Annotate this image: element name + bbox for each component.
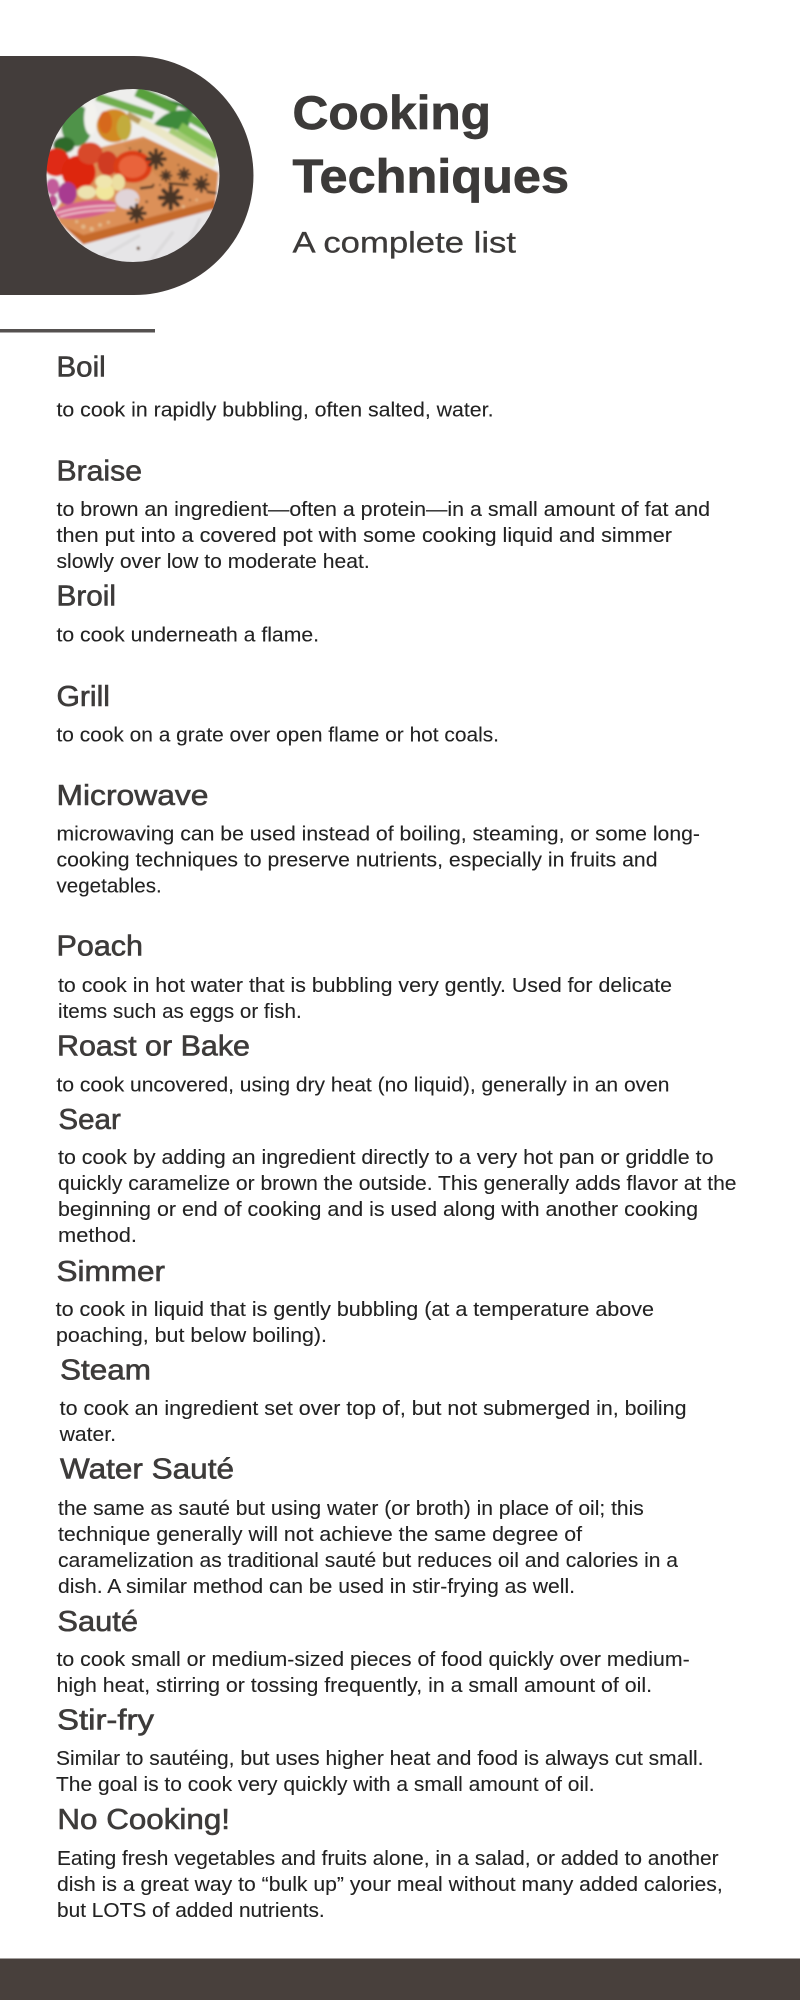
entry: Grill (56, 681, 499, 746)
entry: Steam: to cook an ingredient set over top of, but not submerged in, boiling (60, 1398, 686, 1420)
entry: No Cooking!: No Cooking! (57, 1804, 230, 1836)
entry: Poach: items such as eggs or fish. (58, 1001, 302, 1023)
divider line (0, 329, 155, 332)
entry: Poach (56, 930, 672, 1023)
entry: Boil: to cook in rapidly bubbling, often salted, water. (56, 400, 494, 422)
title (292, 86, 569, 203)
entry: Microwave (56, 780, 700, 897)
title: Techniques (292, 150, 569, 203)
entry: Roast or Bake: to cook uncovered, using dry heat (no liquid), generally in an oven (56, 1074, 670, 1096)
entry: Sauté (56, 1606, 690, 1697)
entry: Simmer (56, 1256, 654, 1347)
entry: Microwave: microwaving can be used instead of boiling, steaming, or some long- (56, 823, 700, 845)
entry: Sauté: to cook small or medium-sized pieces of food quickly over medium- (56, 1649, 690, 1671)
entry: Sauté: Sauté (57, 1606, 138, 1638)
entry: Broil (56, 581, 319, 646)
entry: Boil: Boil (56, 352, 106, 384)
entry: Sear: quickly caramelize or brown the outside. This generally adds flavor at the (58, 1173, 736, 1195)
entry: Poach: to cook in hot water that is bubbling very gently. Used for delicate (58, 975, 672, 997)
photo: vegetables and spices on cutting board (42, 87, 223, 267)
entry: Water Sauté: technique generally will not achieve the same degree of (58, 1524, 582, 1546)
entry: Water Sauté: the same as sauté but using water (or broth) in place of oil; this (58, 1498, 644, 1520)
entry: Sear (58, 1104, 736, 1247)
entry: Sear: to cook by adding an ingredient directly to a very hot pan or griddle to (58, 1147, 714, 1169)
entry: Roast or Bake (56, 1031, 670, 1096)
entry: Stir-fry: Similar to sautéing, but uses higher heat and food is always cut small. (56, 1748, 704, 1770)
entry: Steam: Steam (60, 1355, 151, 1387)
entry: Sear: beginning or end of cooking and is used along with another cooking (58, 1199, 698, 1221)
entry: Sear: Sear (58, 1104, 121, 1136)
footer band (0, 1958, 800, 2000)
entry: Simmer: to cook in liquid that is gently bubbling (at a temperature above (56, 1299, 654, 1321)
entry: No Cooking!: but LOTS of added nutrients. (57, 1900, 325, 1922)
entry: Braise (56, 456, 710, 573)
entry: Braise: slowly over low to moderate heat. (56, 551, 370, 573)
entry: Stir-fry (56, 1705, 704, 1796)
entry: Braise: then put into a covered pot with some cooking liquid and simmer (56, 525, 672, 547)
entry: Water Sauté (58, 1453, 679, 1598)
entry: Simmer: poaching, but below boiling). (56, 1325, 327, 1347)
entry: Roast or Bake: Roast or Bake (57, 1031, 250, 1063)
entry: Grill: Grill (56, 681, 110, 713)
entry: Water Sauté: caramelization as traditional sauté but reduces oil and calories in a (58, 1550, 679, 1572)
entry: Microwave: vegetables. (56, 875, 162, 897)
entry: Water Sauté: Water Sauté (60, 1453, 234, 1485)
header panel: dark rounded shape (0, 56, 253, 295)
entry: Steam: water. (59, 1424, 116, 1446)
entry: Steam (59, 1355, 686, 1446)
subtitle: A complete list (292, 227, 517, 260)
entry: Broil: to cook underneath a flame. (56, 624, 319, 646)
entry: Microwave: Microwave (56, 780, 208, 812)
entry: Grill: to cook on a grate over open flame or hot coals. (56, 724, 499, 746)
entry: No Cooking!: dish is a great way to “bulk up” your meal without many added calories, (57, 1874, 723, 1896)
entry: Poach: Poach (56, 930, 143, 962)
entry: Water Sauté: dish. A similar method can be used in stir-frying as well. (58, 1576, 575, 1598)
entry: No Cooking! (57, 1804, 723, 1922)
entry: Sauté: high heat, stirring or tossing frequently, in a small amount of oil. (56, 1675, 652, 1697)
entry: Braise: Braise (56, 456, 142, 488)
entry: No Cooking!: Eating fresh vegetables and fruits alone, in a salad, or added to another (57, 1848, 719, 1870)
entry: Sear: method. (58, 1225, 137, 1247)
entry: Simmer: Simmer (56, 1256, 166, 1288)
entry: Boil (56, 352, 494, 422)
title: Cooking (292, 86, 491, 139)
entry: Braise: to brown an ingredient—often a protein—in a small amount of fat and (56, 499, 710, 521)
entry: Stir-fry: The goal is to cook very quickly with a small amount of oil. (56, 1774, 595, 1796)
entry: Microwave: cooking techniques to preserve nutrients, especially in fruits and (56, 849, 658, 871)
entry: Broil: Broil (56, 581, 116, 613)
entry: Stir-fry: Stir-fry (57, 1705, 155, 1737)
